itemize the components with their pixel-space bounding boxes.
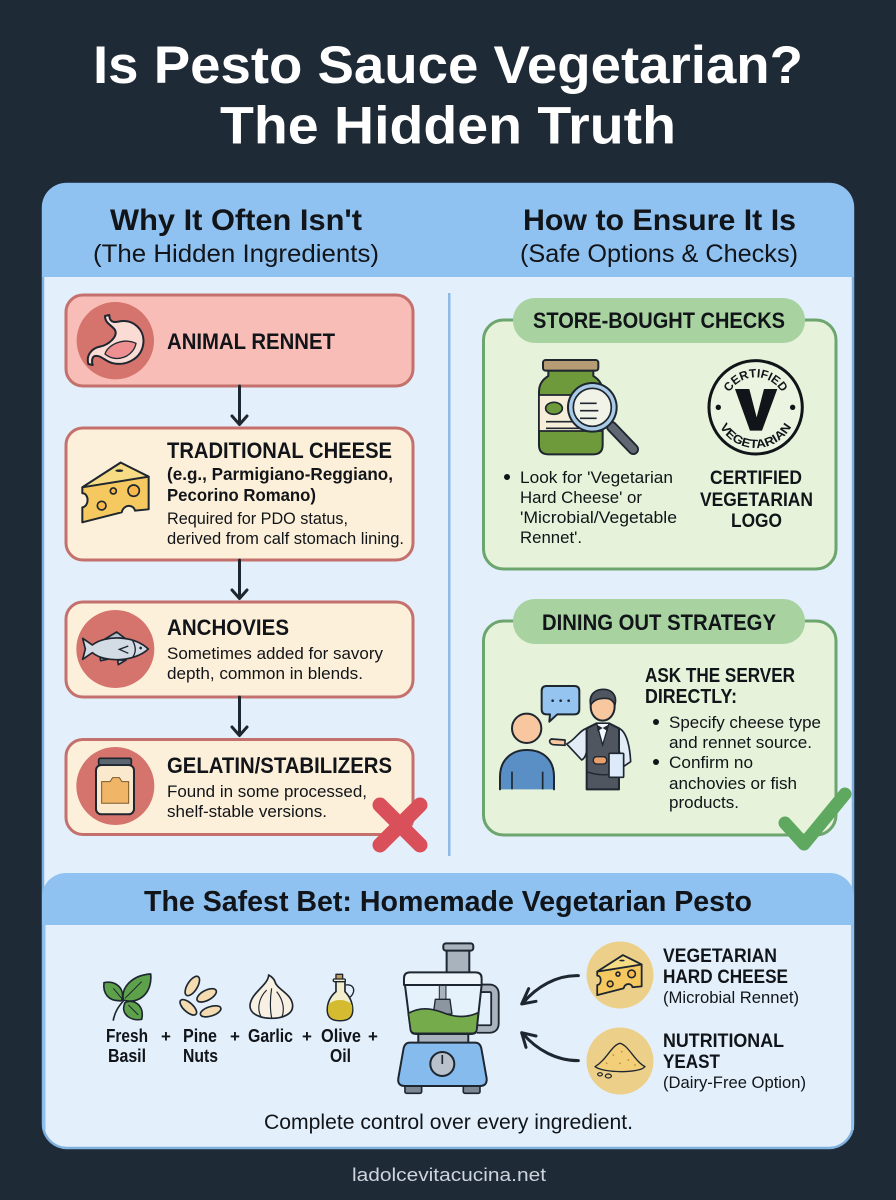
text: anchovies: ANCHOVIES (167, 615, 289, 640)
ingredient: pine nuts: Pine (183, 1026, 217, 1046)
text: nutritional yeast (663, 1031, 806, 1092)
plus: + (302, 1027, 312, 1046)
icon: fish (76, 610, 154, 688)
bullet: look for: Rennet'. (520, 528, 582, 547)
text: traditional cheese: derived from calf stomach lining. (167, 529, 404, 548)
text: ask the server: Confirm no (669, 753, 753, 772)
text: traditional cheese: Pecorino Romano) (167, 485, 316, 505)
bullet: look for (504, 468, 677, 547)
ingredient: garlic: Garlic (248, 1026, 293, 1046)
logo: certified vegetarian: VEGETARIAN (722, 422, 791, 448)
text: gelatin: GELATIN/STABILIZERS (167, 753, 392, 778)
text: ask the server: and rennet source. (669, 733, 812, 752)
panel header: safest bet (42, 873, 854, 925)
panel header: columns (42, 183, 854, 277)
option: nutritional yeast (586, 1028, 806, 1094)
logo: certified vegetarian: CERTIFIED (724, 368, 787, 390)
label: animal rennet: ANIMAL RENNET (167, 329, 336, 354)
logo: certified vegetarian (707, 359, 804, 456)
text: traditional cheese (167, 438, 404, 548)
card: dining out strategy (484, 599, 836, 835)
text: nutritional yeast: (Dairy-Free Option) (663, 1073, 806, 1092)
text: vegetarian hard cheese (663, 946, 799, 1007)
icon: customer and waiter (500, 686, 631, 789)
arrow (232, 560, 247, 598)
ingredient: olive oil: Olive (321, 1026, 361, 1046)
text: ask the server: Specify cheese type (669, 713, 821, 732)
icon: jar (76, 747, 154, 825)
heading pill: store-bought checks (513, 298, 805, 343)
heading: why it often isn't: (The Hidden Ingredients) (93, 240, 379, 268)
icon: green check (785, 794, 845, 844)
card: gelatin (66, 740, 413, 834)
panel: hidden ingredients (66, 295, 420, 845)
arrow: yeast to processor (522, 1033, 578, 1061)
label: certified vegetarian logo: LOGO (731, 511, 782, 532)
text: ask the server: anchovies or fish (669, 774, 797, 793)
bullet: look for: Look for 'Vegetarian (520, 468, 673, 487)
text: ask the server: DIRECTLY: (645, 686, 737, 708)
title (93, 36, 803, 156)
label: certified vegetarian logo (700, 468, 813, 532)
ingredient: olive oil: Oil (330, 1046, 351, 1066)
label: certified vegetarian logo: CERTIFIED (710, 468, 802, 489)
text: gelatin: shelf-stable versions. (167, 802, 327, 821)
heading: how to ensure it is (520, 204, 798, 268)
arrow (232, 386, 247, 424)
bullet: look for: Hard Cheese' or (520, 488, 642, 507)
plus: + (161, 1027, 171, 1046)
ingredient: pine nuts: Nuts (183, 1046, 218, 1066)
main panel (42, 182, 854, 1150)
text: gelatin: Found in some processed, (167, 782, 367, 801)
text: anchovies: Sometimes added for savory (167, 644, 383, 663)
icon: stomach (77, 302, 154, 379)
text: vegetarian hard cheese: VEGETARIAN (663, 946, 777, 967)
heading pill: store-bought checks: STORE-BOUGHT CHECKS (533, 308, 785, 333)
option: vegetarian hard cheese (586, 942, 799, 1008)
text: nutritional yeast: YEAST (663, 1052, 720, 1073)
arrow (232, 697, 247, 736)
heading: why it often isn't (93, 204, 379, 268)
card: animal rennet (66, 295, 413, 386)
heading: why it often isn't: Why It Often Isn't (110, 204, 362, 237)
ingredient: fresh basil: Fresh (106, 1026, 148, 1046)
icon: red cross (380, 805, 420, 845)
text: vegetarian hard cheese: (Microbial Rennet) (663, 988, 799, 1007)
heading: how to ensure it is: (Safe Options & Checks) (520, 240, 798, 268)
card: store-bought checks (482, 298, 838, 570)
text: traditional cheese: (e.g., Parmigiano-Reggiano, (167, 464, 393, 484)
title: The Hidden Truth (220, 96, 676, 156)
text: gelatin (167, 753, 392, 821)
footer: ladolcevitacucina.net (352, 1165, 546, 1185)
icon: cheese (82, 463, 149, 522)
card: traditional cheese (66, 428, 413, 560)
heading: how to ensure it is: How to Ensure It Is (523, 204, 796, 237)
card: anchovies (66, 602, 413, 697)
text: ask the server: products. (669, 793, 739, 812)
plus: + (230, 1027, 240, 1046)
panel header: safest bet: The Safest Bet: Homemade Vegetarian Pesto (144, 886, 752, 918)
text: nutritional yeast: NUTRITIONAL (663, 1031, 784, 1052)
text: ask the server (645, 665, 821, 812)
ingredient: fresh basil (104, 974, 151, 1066)
icon: jar with magnifier (539, 360, 633, 454)
title: Is Pesto Sauce Vegetarian? (93, 36, 803, 95)
panel: homemade pesto (42, 873, 854, 1134)
ingredient: garlic (248, 975, 293, 1046)
arrow: cheese to processor (522, 976, 578, 1004)
icon: cheese circle (586, 942, 654, 1008)
text: traditional cheese: TRADITIONAL CHEESE (167, 438, 392, 463)
text: anchovies (167, 615, 383, 683)
label: certified vegetarian logo: VEGETARIAN (700, 490, 813, 511)
ingredient: fresh basil: Basil (108, 1046, 146, 1066)
ingredient: pine nuts (178, 974, 222, 1066)
text: ask the server: ASK THE SERVER (645, 665, 795, 687)
icon: yeast circle (586, 1028, 654, 1094)
plus: + (368, 1027, 378, 1046)
text: vegetarian hard cheese: HARD CHEESE (663, 967, 788, 988)
text: traditional cheese: Required for PDO status, (167, 509, 348, 528)
caption: Complete control over every ingredient. (264, 1111, 633, 1134)
panel: safe options (482, 298, 852, 850)
text: anchovies: depth, common in blends. (167, 664, 363, 683)
icon: food processor (398, 943, 495, 1093)
heading pill: dining out strategy (513, 599, 805, 644)
ingredient: olive oil (321, 974, 361, 1066)
bullet: look for: 'Microbial/Vegetable (520, 508, 677, 527)
heading pill: dining out strategy: DINING OUT STRATEGY (542, 610, 776, 635)
